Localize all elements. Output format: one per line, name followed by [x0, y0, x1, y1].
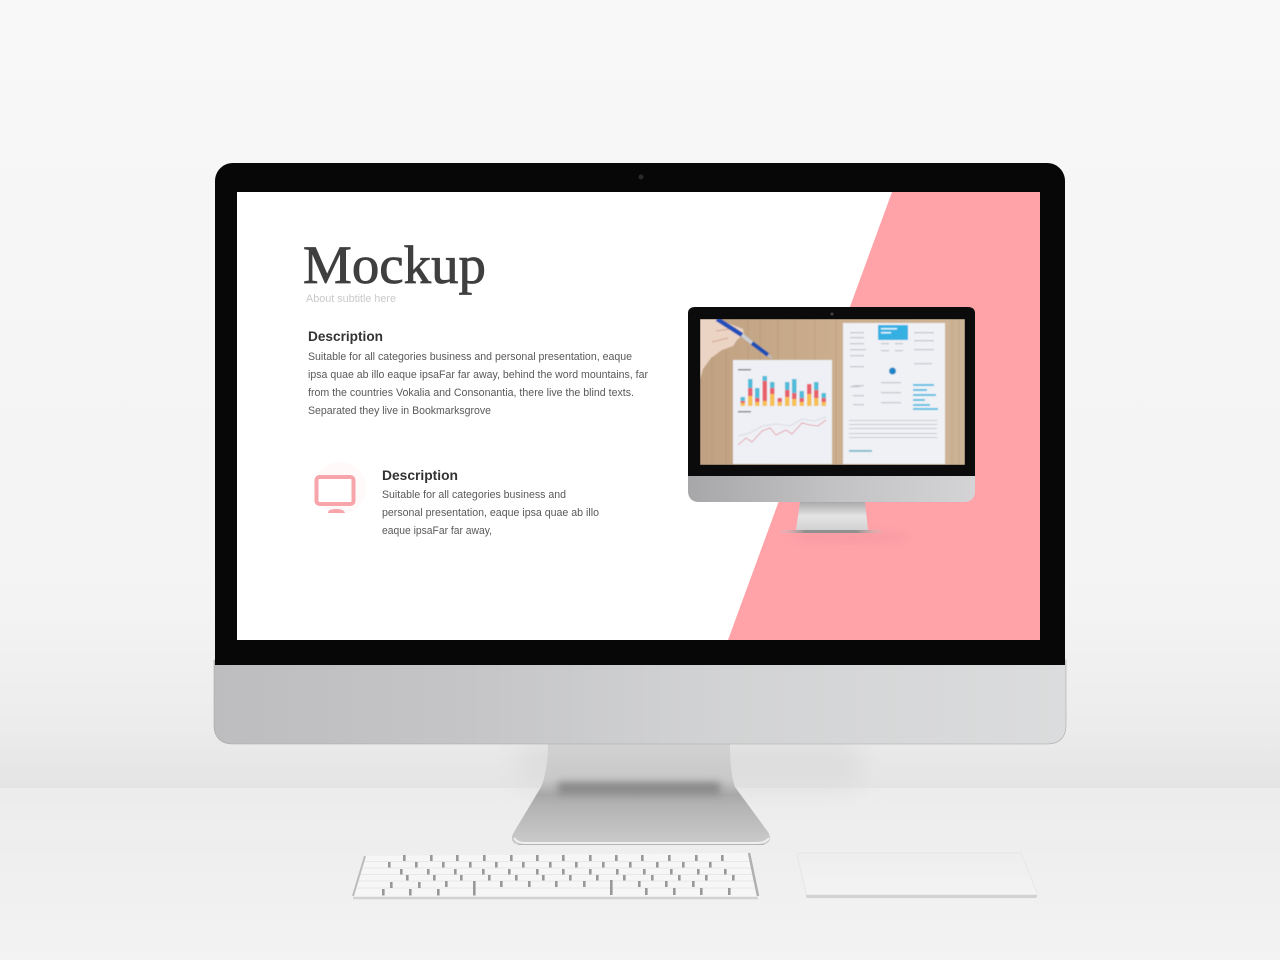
heading: Description — [308, 328, 383, 344]
icon: monitor — [314, 462, 366, 514]
pink diagonal panel — [728, 192, 1040, 640]
small monitor mockup — [688, 307, 975, 543]
stand shadow — [790, 531, 910, 543]
body text — [382, 489, 599, 537]
heading: Description — [382, 467, 458, 483]
small stand — [796, 502, 868, 530]
right paper resume — [843, 323, 945, 464]
large monitor — [214, 163, 1066, 744]
small webcam — [830, 312, 834, 316]
wood surface — [700, 319, 965, 465]
description block two — [382, 467, 599, 537]
key row lines — [356, 862, 756, 888]
body text: from the countries Vokalia and Consonantia, there live the blind texts. — [308, 387, 634, 399]
body text: Suitable for all categories business and — [382, 489, 566, 501]
trackpad — [797, 853, 1037, 898]
body text — [308, 351, 648, 417]
title: Mockup — [303, 235, 486, 295]
small stand foot — [780, 530, 882, 533]
photo: desk with charts — [700, 319, 965, 465]
line chart — [738, 417, 826, 445]
monitor stand — [512, 744, 770, 845]
webcam — [638, 174, 644, 180]
small chin — [688, 470, 975, 502]
subtitle: About subtitle here — [306, 293, 396, 305]
bar chart — [740, 376, 826, 406]
hand holding pen — [700, 319, 772, 380]
monitor bezel — [215, 163, 1065, 665]
body text: Separated they live in Bookmarksgrove — [308, 405, 491, 417]
infographic scene — [0, 163, 1280, 900]
small bezel — [688, 307, 975, 476]
keyboard body — [352, 853, 759, 899]
description block one — [308, 328, 648, 417]
body text: Suitable for all categories business and personal presentation, eaque — [308, 351, 632, 363]
keyboard edge — [353, 856, 365, 896]
desk surface — [0, 788, 1280, 960]
trackpad edge — [806, 895, 1037, 898]
monitor shadow on wall — [520, 745, 860, 785]
keyboard — [352, 853, 759, 899]
left paper with charts — [733, 360, 832, 464]
monitor chin — [214, 660, 1066, 744]
body text: eaque ipsaFar far away, — [382, 525, 492, 537]
slide background — [237, 192, 1040, 640]
body text: personal presentation, eaque ipsa quae ab illo — [382, 507, 599, 519]
screen slide — [237, 192, 1040, 640]
body text: ipsa quae ab illo eaque ipsaFar far away, behind the word mountains, far — [308, 369, 648, 381]
key gaps — [382, 855, 735, 896]
